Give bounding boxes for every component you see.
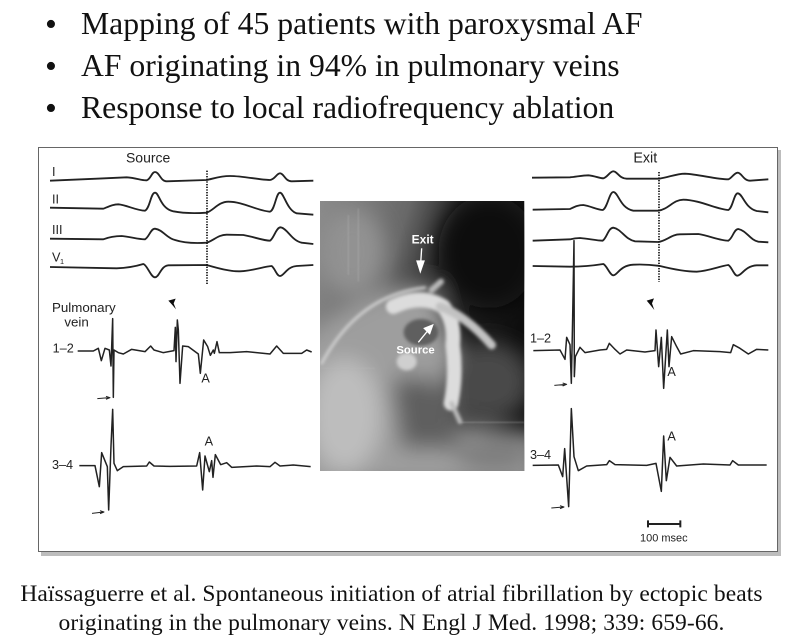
trace 1-2 [78,319,312,397]
lead I trace [50,172,313,181]
label 3-4: 3–4 [52,458,73,472]
small arrow [554,383,567,386]
panel frame [38,148,781,556]
pulmonary vein label: Pulmonary [52,300,116,315]
bullet markers: • [45,6,57,43]
small arrow [551,506,564,509]
citation line 2: originating in the pulmonary veins. N Engl J Med. 1998; 339: 659-66. [58,610,725,636]
left ECG: source [50,149,313,514]
label A: A [667,365,676,379]
lead III trace [533,228,768,242]
label Exit: Exit [412,233,434,247]
lead labels: V [52,250,61,264]
label 3-4: 3–4 [530,448,551,462]
small arrow [97,396,110,399]
arrowhead marker [168,299,176,309]
lead labels: III [52,223,63,237]
lead III trace [50,227,313,244]
bullet markers: • [45,48,57,85]
bullet 2: AF originating in 94% in pulmonary veins [81,48,620,83]
small arrow [92,511,104,514]
arrowhead marker [647,298,654,310]
right ECG: exit [530,151,768,545]
label 1-2: 1–2 [53,342,74,356]
figure panel [38,147,781,556]
label A: A [201,371,210,385]
lead V1 trace [533,264,768,276]
pulmonary vein contrast [322,282,492,422]
trace 3-4 [533,409,767,507]
pulmonary vein label [52,300,116,329]
lead II trace [533,192,768,212]
pulmonary vein label: vein [64,314,89,329]
x-ray streaks [348,209,524,424]
label 1-2: 1–2 [530,332,551,346]
bullet list [45,6,643,127]
trace 3-4 [79,409,311,510]
shadow inside vein loop [404,319,438,346]
dotted time marker [656,172,661,282]
lead labels: 1 [60,257,64,266]
bullet 3: Response to local radiofrequency ablation [81,90,614,125]
angiogram image [320,201,524,471]
soft body tones [320,201,524,471]
bullet 1: Mapping of 45 patients with paroxysmal AF [81,6,643,41]
citation line 1: Haïssaguerre et al. Spontaneous initiation of atrial fibrillation by ectopic beats [20,581,763,607]
lead labels [52,165,64,266]
bullet markers [45,6,57,127]
dotted time marker [204,171,209,285]
scale label: 100 msec [640,533,688,545]
arrow to exit [417,248,424,272]
label A: A [205,435,214,449]
citation [20,581,763,636]
lead V1 trace [50,264,313,277]
dark background [320,201,524,471]
lead labels: I [52,165,56,179]
heading: Exit: Exit [633,151,657,167]
trace 1-2 [533,241,768,388]
heading: Source: Source [126,149,171,165]
arrow to source [418,325,433,342]
scale bar [648,520,680,527]
label A: A [667,430,676,444]
bullet markers: • [45,90,57,127]
lead I trace [532,171,768,181]
label Source: Source [396,345,435,357]
lead II trace [50,193,313,215]
lead labels: II [52,192,59,206]
